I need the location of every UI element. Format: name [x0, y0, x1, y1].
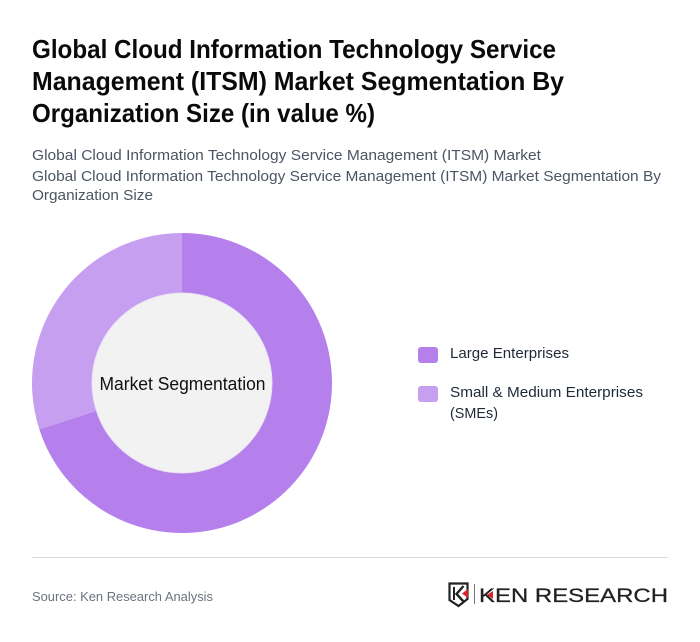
title: Management (ITSM) Market Segmentation By	[32, 66, 565, 96]
subtitle	[32, 147, 662, 204]
donut centre	[92, 293, 272, 473]
wordmark: KEN RESEARCH	[479, 585, 668, 607]
donut chart	[32, 233, 332, 533]
title: Global Cloud Information Technology Service	[32, 34, 556, 64]
legend item: Large Enterprises: Large Enterprises	[450, 345, 569, 362]
legend	[418, 345, 643, 422]
icon: shield	[450, 584, 468, 606]
subtitle: Global Cloud Information Technology Service Management (ITSM) Market Segmentation By	[32, 168, 662, 185]
subtitle: Global Cloud Information Technology Service Management (ITSM) Market	[32, 147, 542, 164]
legend item: Small & Medium Enterprises: (SMEs)	[450, 405, 498, 422]
source note: Source: Ken Research Analysis	[32, 589, 213, 604]
logo: Ken Research	[450, 584, 668, 607]
legend item: Small & Medium Enterprises	[418, 384, 643, 422]
segment: Large Enterprises	[39, 233, 332, 533]
donut centre label: Market Segmentation	[100, 374, 266, 394]
legend item: Small & Medium Enterprises: Small & Medium Enterprises	[450, 384, 643, 401]
title	[32, 34, 565, 128]
subtitle: Organization Size	[32, 187, 153, 204]
segment: Small & Medium Enterprises	[32, 233, 182, 429]
title: Organization Size (in value %)	[32, 98, 375, 128]
